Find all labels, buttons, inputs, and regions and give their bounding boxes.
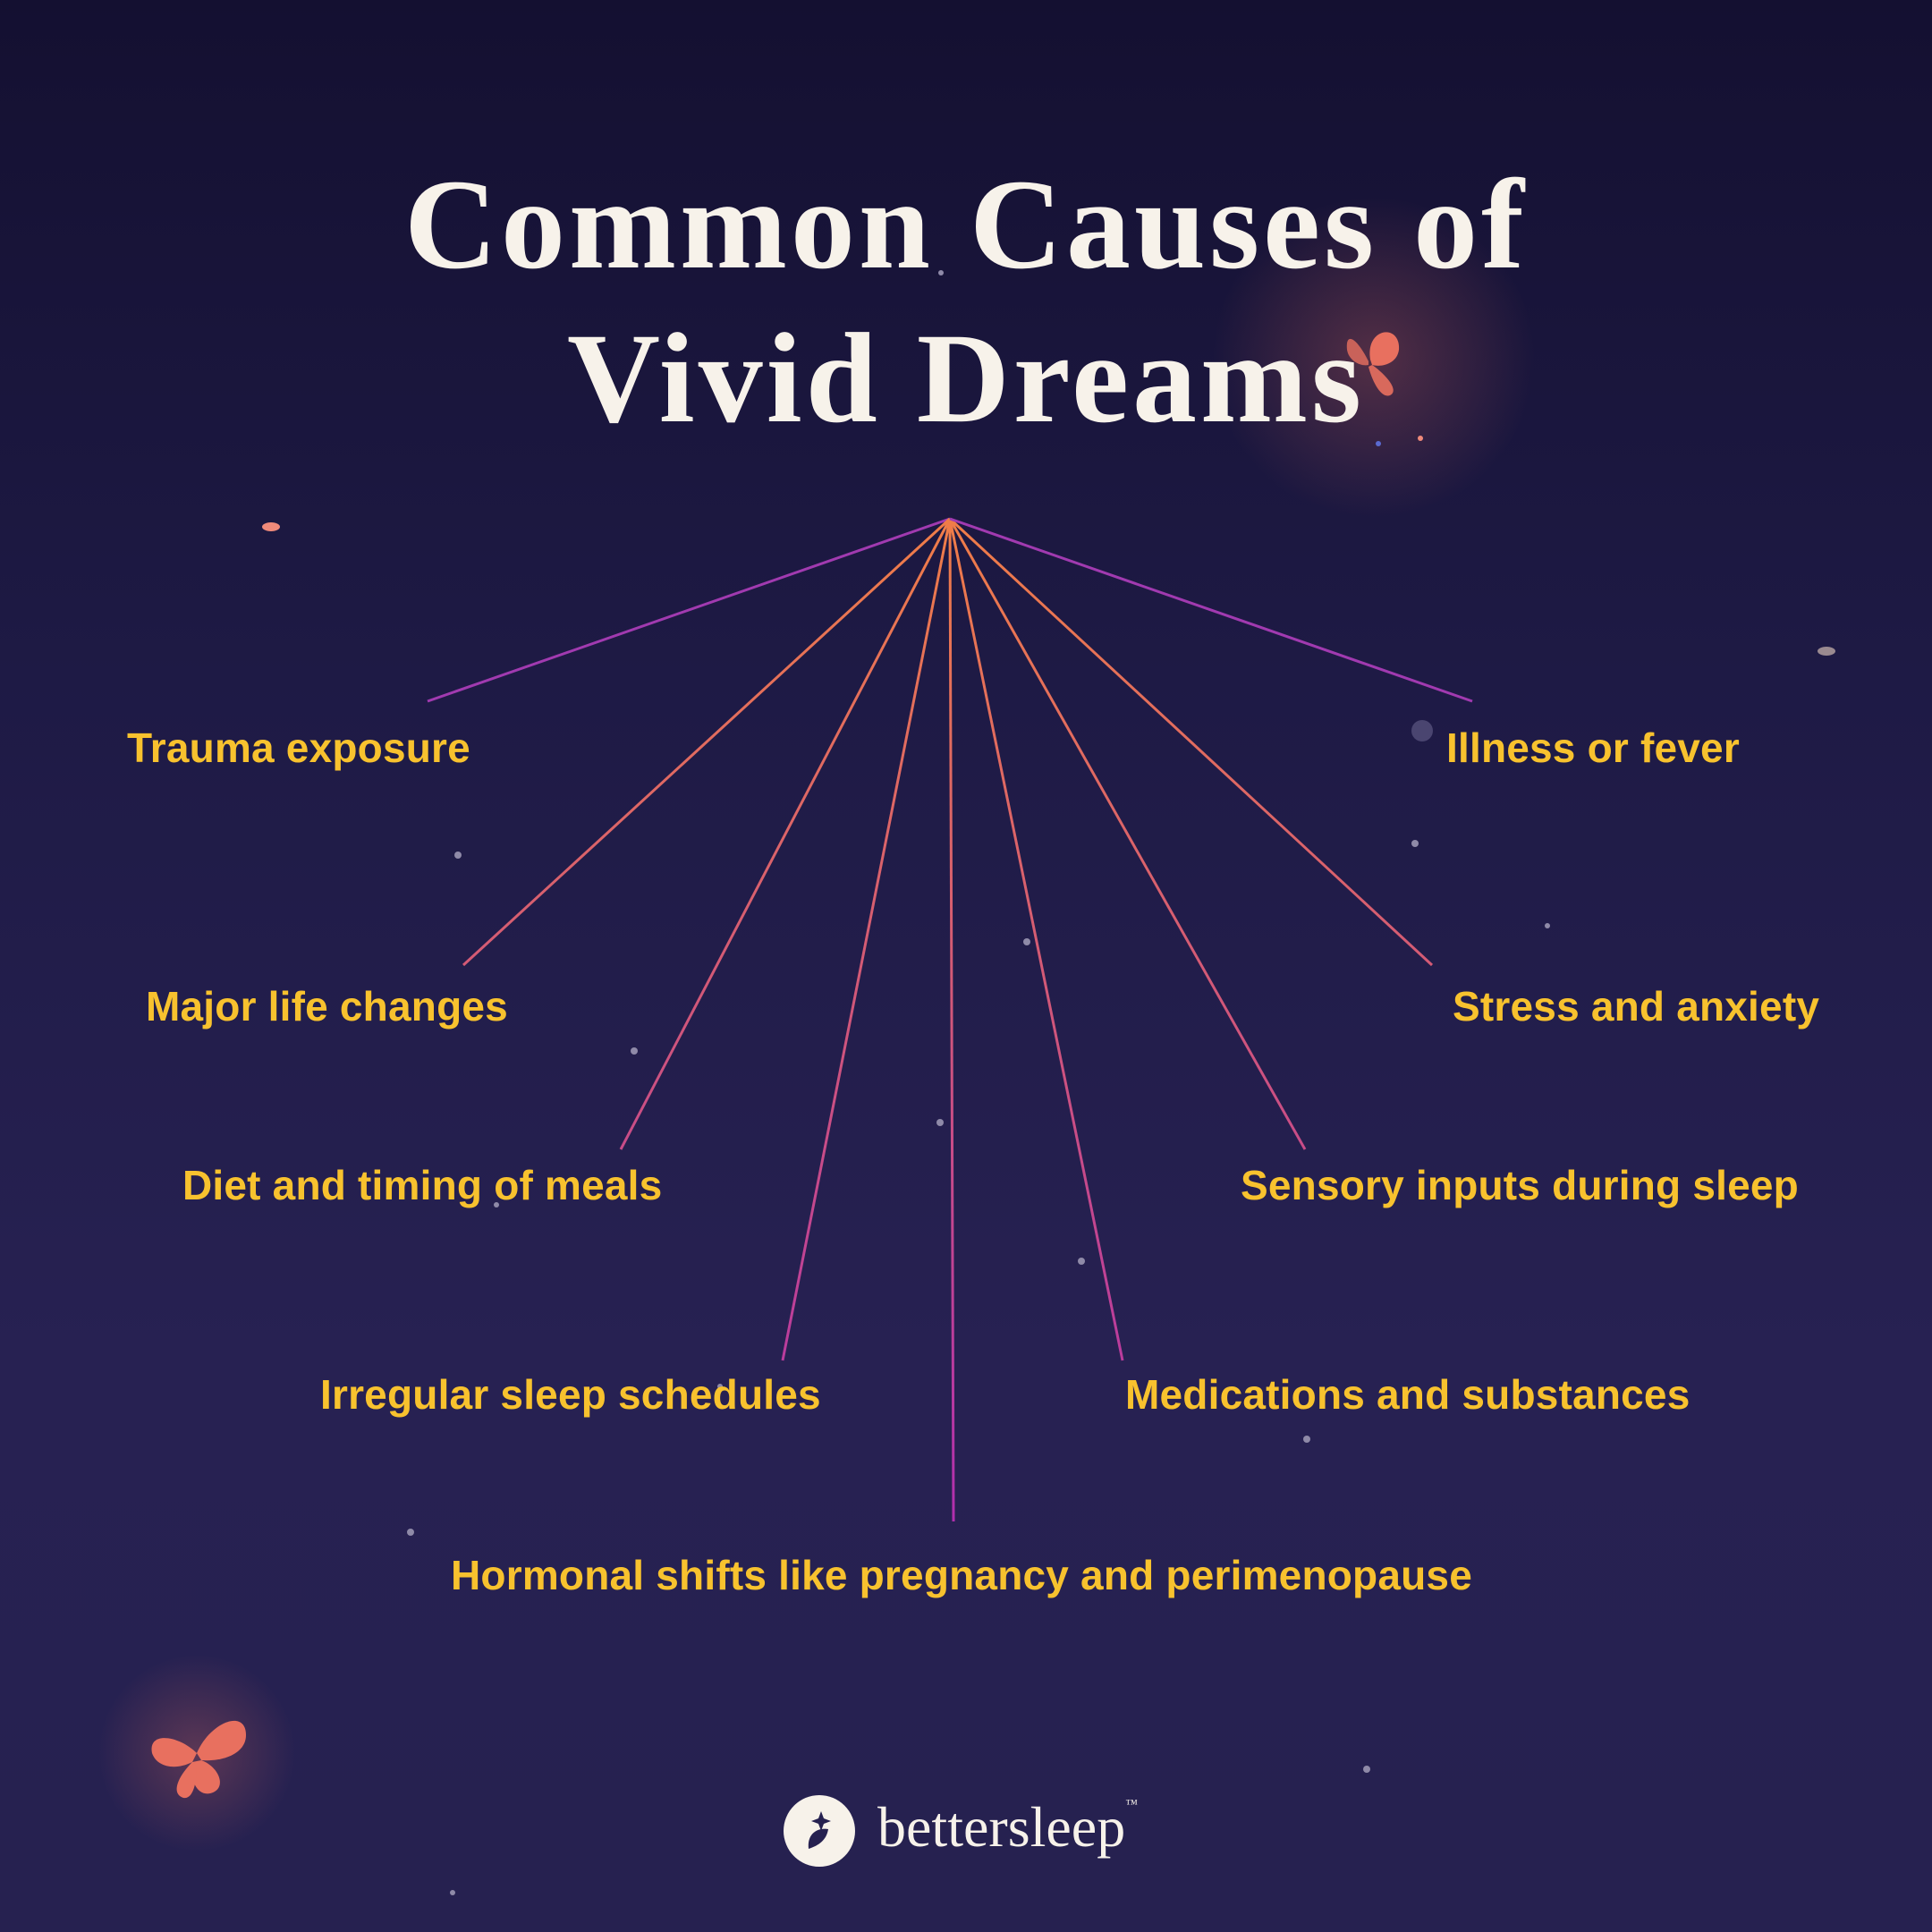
label: Medications and substances: Medications and substances: [1125, 1371, 1690, 1418]
label: Trauma exposure: Trauma exposure: [127, 724, 470, 771]
label: Diet and timing of meals: Diet and timing of meals: [182, 1162, 662, 1208]
label: Stress and anxiety: Stress and anxiety: [1453, 983, 1819, 1030]
brand name: bettersleep™: [877, 1795, 1138, 1859]
label: Major life changes: Major life changes: [146, 983, 508, 1030]
label: Hormonal shifts: Hormonal shifts like pregnancy and perimenopause: [451, 1552, 1472, 1598]
label: Sensory inputs during sleep: Sensory inputs during sleep: [1241, 1162, 1799, 1208]
logo: [784, 1795, 1138, 1867]
title: Vivid Dreams: [567, 308, 1365, 450]
label: Illness or fever: Illness or fever: [1446, 724, 1740, 771]
title: Common Causes of: [404, 154, 1528, 296]
icon: logo circle: [784, 1795, 855, 1867]
label: Irregular sleep schedules: Irregular sleep schedules: [320, 1371, 821, 1418]
title: [404, 154, 1528, 450]
